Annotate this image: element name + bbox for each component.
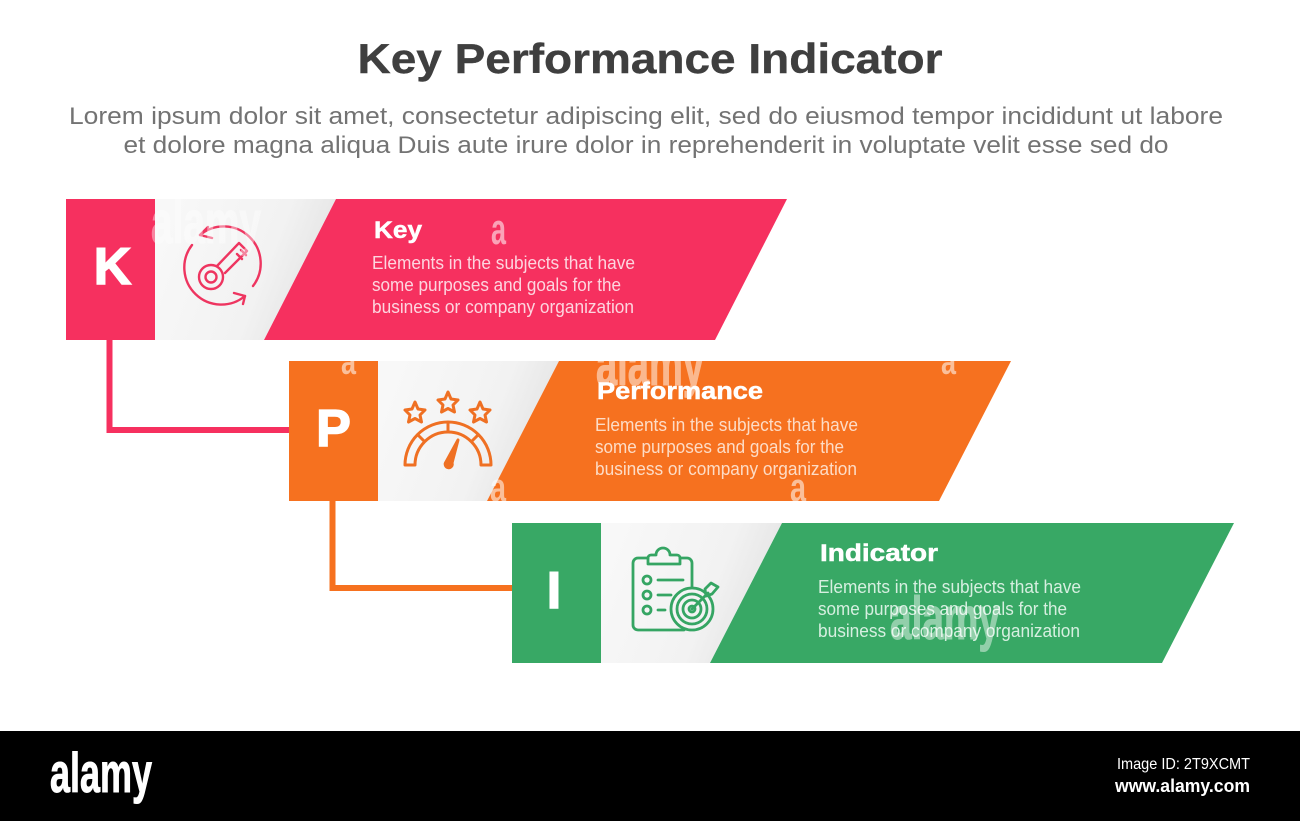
watermarks: a: [790, 466, 807, 510]
watermarks: a: [341, 341, 357, 382]
letter block: I: I: [547, 562, 561, 620]
description: performance: business or company organization: [595, 459, 857, 479]
connector: key to performance: [110, 340, 289, 430]
description: key: business or company organization: [372, 297, 634, 317]
title: Key Performance Indicator: [358, 35, 942, 82]
watermarks: alamy: [596, 331, 704, 398]
panel: key: [66, 199, 787, 340]
description: performance: some purposes and goals for the: [595, 437, 844, 457]
letter block: K: [66, 199, 155, 340]
panel: indicator: [512, 523, 1234, 663]
footer logo: alamy: [50, 741, 152, 804]
footer image id: Image ID: 2T9XCMT: [1117, 756, 1250, 773]
banner: performance: [487, 361, 1011, 501]
description: key: Elements in the subjects that have: [372, 253, 635, 273]
watermarks: [151, 189, 1000, 652]
fold background: indicator: [600, 523, 782, 663]
icon: clipboard with target: [633, 548, 718, 630]
description: indicator: business or company organization: [818, 621, 1080, 641]
fold background: performance: [377, 361, 559, 501]
fold background: key: [154, 199, 336, 340]
letter block: I: [512, 523, 601, 663]
watermarks: alamy: [151, 189, 261, 256]
subtitle text block: et dolore magna aliqua Duis aute irure dolor in reprehenderit in voluptate velit esse sed do: [124, 132, 1168, 159]
description: key: [372, 253, 635, 317]
heading: key: Key: [374, 217, 423, 244]
footer bar: [0, 731, 1300, 821]
connector: performance to indicator: [332, 501, 512, 588]
watermarks: a: [941, 341, 957, 382]
description: indicator: [818, 577, 1081, 641]
icon: key with circular arrows: [184, 226, 261, 305]
banner: key: [264, 199, 787, 340]
letter block: P: [289, 361, 378, 501]
banner: indicator: [710, 523, 1234, 663]
description: key: some purposes and goals for the: [372, 275, 621, 295]
subtitle text block: [69, 103, 1223, 159]
description: indicator: some purposes and goals for the: [818, 599, 1067, 619]
heading: indicator: Indicator: [820, 540, 938, 567]
letter block: P: P: [316, 400, 351, 458]
letter block: K: K: [94, 238, 132, 296]
description: performance: [595, 415, 858, 479]
watermarks: alamy: [890, 585, 1000, 652]
watermarks: a: [491, 205, 506, 254]
description: performance: Elements in the subjects that have: [595, 415, 858, 435]
heading: performance: Performance: [597, 378, 763, 405]
icon: gauge with three stars: [405, 392, 491, 468]
watermarks: a: [490, 466, 507, 510]
subtitle text block: Lorem ipsum dolor sit amet, consectetur adipiscing elit, sed do eiusmod tempor incididunt ut labore: [69, 103, 1223, 130]
footer url: www.alamy.com: [1114, 776, 1250, 796]
description: indicator: Elements in the subjects that have: [818, 577, 1081, 597]
panel: performance: [289, 361, 1011, 501]
